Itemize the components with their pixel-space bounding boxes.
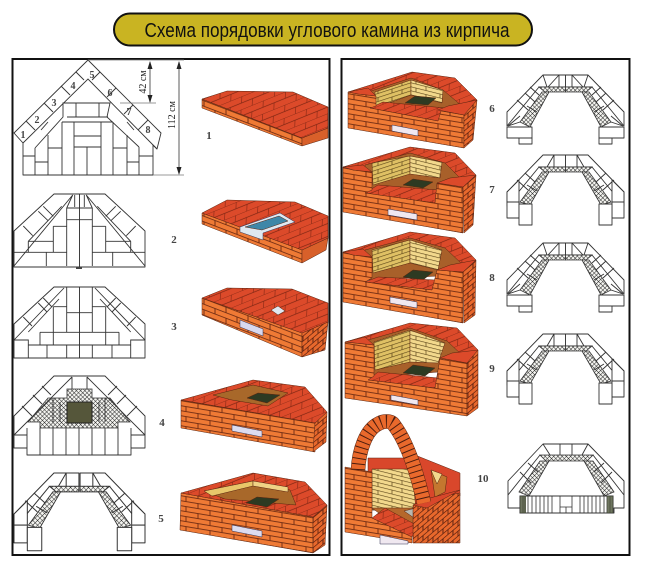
title banner bbox=[114, 14, 532, 46]
floor plan 10 bbox=[508, 444, 624, 513]
layer numbers, right column: 9 bbox=[489, 363, 495, 375]
layer numbers, left column: 2 bbox=[171, 234, 177, 246]
layer numbers, right column: 7 bbox=[489, 184, 495, 196]
layer 2 bricks with ash pit bbox=[202, 200, 328, 263]
floor plan 2 bbox=[14, 194, 145, 269]
title banner: Схема порядовки углового камина из кирпича bbox=[144, 20, 510, 42]
layer 1 bricks bbox=[202, 91, 328, 146]
floor plan 5 bbox=[14, 473, 145, 551]
floor plan 1 with dimensions: 7 bbox=[126, 107, 132, 118]
layer 10 bricks with arch bbox=[345, 421, 460, 544]
floor plan 1 with dimensions bbox=[14, 60, 184, 175]
floor plan 1 with dimensions: 6 bbox=[108, 88, 112, 99]
floor plan 8 bbox=[507, 243, 624, 312]
layer numbers, right column: 6 bbox=[489, 103, 495, 115]
floor plan 1 with dimensions: 3 bbox=[52, 98, 56, 109]
floor plan 6 bbox=[507, 75, 624, 144]
layer numbers, left column: 5 bbox=[158, 513, 164, 525]
layer numbers, right column: 8 bbox=[489, 272, 495, 284]
panel: left, layers 1 to 5 bbox=[12, 59, 330, 555]
layer numbers, left column: 3 bbox=[171, 321, 177, 333]
floor plan 9 bbox=[507, 334, 624, 404]
floor plan 3 bbox=[14, 287, 145, 358]
floor plan 1 with dimensions: 1 bbox=[20, 130, 26, 141]
floor plan 4 with hatched firebrick bbox=[14, 376, 145, 455]
floor plan 1 with dimensions: 112 см bbox=[167, 100, 178, 129]
panel: right, layers 6 to 10 bbox=[342, 59, 630, 555]
floor plan 7 bbox=[507, 155, 624, 225]
floor plan 1 with dimensions: 8 bbox=[146, 125, 150, 136]
layer numbers, left column: 1 bbox=[206, 130, 212, 142]
floor plan 1 with dimensions: 42 см bbox=[138, 70, 149, 94]
floor plan 1 with dimensions: 5 bbox=[90, 70, 94, 81]
layer 5 bricks with firebox bbox=[180, 473, 327, 553]
layer numbers, right column: 10 bbox=[478, 473, 489, 485]
layer numbers, left column: 4 bbox=[159, 417, 165, 429]
layer 3 bricks bbox=[202, 288, 328, 357]
layer numbers, left column bbox=[158, 130, 212, 525]
layer numbers, right column bbox=[478, 103, 495, 485]
floor plan 1 with dimensions: 4 bbox=[70, 81, 76, 92]
layer 9 bricks bbox=[345, 323, 478, 416]
layer 4 bricks with firebox bbox=[181, 380, 327, 452]
layer 6 bricks bbox=[348, 72, 477, 148]
floor plan 1 with dimensions: 2 bbox=[34, 115, 40, 126]
layer 8 bricks bbox=[343, 232, 476, 323]
layer 7 bricks bbox=[343, 147, 476, 233]
